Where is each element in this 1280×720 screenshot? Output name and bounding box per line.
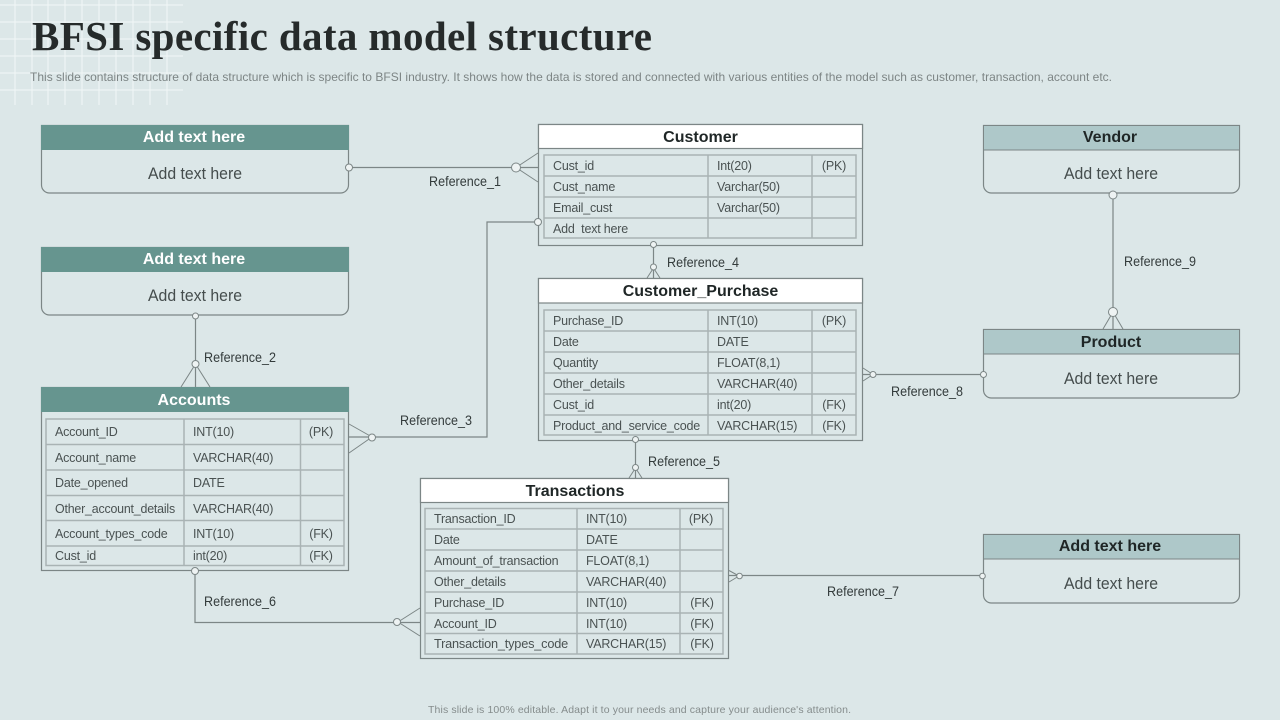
table: Accounts: Accounts — [158, 392, 231, 409]
connector: Reference_5: Reference_5 — [648, 454, 720, 469]
table: Accounts: (FK) — [309, 527, 333, 541]
table: Accounts: INT(10) — [193, 527, 234, 541]
table: Accounts: Account_name — [55, 451, 136, 465]
panel: Product: Product — [1081, 334, 1142, 351]
table: Customer: Cust_id — [553, 159, 594, 173]
panel: top-left entity: Add text here — [148, 164, 242, 183]
table: Transactions: INT(10) — [586, 512, 627, 526]
table: Transactions — [420, 478, 728, 658]
table: Customer: Varchar(50) — [717, 180, 780, 194]
connector: Reference_3: Reference_3 — [400, 413, 472, 428]
table: Transactions: (PK) — [689, 512, 713, 526]
connector: Reference_8 — [863, 368, 986, 399]
table: Customer: Cust_name — [553, 180, 615, 194]
table: Customer: Add text here — [553, 222, 628, 236]
table: Transactions: Transaction_ID — [434, 512, 516, 526]
table: Transactions: Amount_of_transaction — [434, 554, 559, 568]
connector: Reference_3 — [349, 218, 542, 453]
panel: bottom-right entity — [984, 534, 1240, 603]
connector: Reference_4: Reference_4 — [667, 255, 739, 270]
panel: second left entity — [41, 247, 349, 315]
table: Customer_Purchase: Purchase_ID — [553, 314, 623, 328]
table: Accounts: (PK) — [309, 425, 333, 439]
table: Customer: Email_cust — [553, 201, 613, 215]
panel: Vendor: Vendor — [1083, 129, 1137, 146]
table: Accounts: VARCHAR(40) — [193, 502, 273, 516]
table: Transactions: INT(10) — [586, 617, 627, 631]
table: Customer_Purchase: Quantity — [553, 356, 599, 370]
table: Customer_Purchase: (PK) — [822, 314, 846, 328]
table: Accounts: DATE — [193, 476, 225, 490]
table: Transactions: VARCHAR(15) — [586, 637, 666, 651]
table: Customer: Int(20) — [717, 159, 752, 173]
table: Customer_Purchase: INT(10) — [717, 314, 758, 328]
table: Customer_Purchase: Other_details — [553, 377, 625, 391]
table: Customer: Customer — [663, 129, 738, 146]
connector: Reference_6: Reference_6 — [204, 594, 276, 609]
panel: Product — [984, 330, 1240, 398]
connector: Reference_8: Reference_8 — [891, 384, 963, 399]
table: Accounts: Account_types_code — [55, 527, 168, 541]
panel: Product: Add text here — [1064, 369, 1158, 388]
table: Customer_Purchase: DATE — [717, 335, 749, 349]
table: Customer: Varchar(50) — [717, 201, 780, 215]
connector: Reference_9: Reference_9 — [1124, 254, 1196, 269]
connector: Reference_1 — [346, 153, 538, 189]
table: Customer — [538, 124, 862, 246]
table: Transactions: Transactions — [526, 483, 624, 500]
table: Customer_Purchase — [538, 278, 862, 440]
panel: bottom-right entity: Add text here — [1059, 538, 1161, 555]
table: Customer_Purchase: Date — [553, 335, 579, 349]
table: Transactions: Transaction_types_code — [434, 637, 568, 651]
table: Accounts: Date_opened — [55, 476, 128, 490]
table: Transactions: (FK) — [690, 596, 714, 610]
table: Transactions: FLOAT(8,1) — [586, 554, 649, 568]
panel: Vendor: Add text here — [1064, 164, 1158, 183]
panel: top-left entity: Add text here — [143, 129, 245, 146]
table: Transactions: DATE — [586, 533, 618, 547]
panel: bottom-right entity: Add text here — [1064, 574, 1158, 593]
table: Accounts: int(20) — [193, 549, 227, 563]
table: Transactions: Account_ID — [434, 617, 497, 631]
table: Customer_Purchase: Cust_id — [553, 398, 594, 412]
panel: second left entity: Add text here — [148, 286, 242, 305]
connector: Reference_6 — [192, 568, 420, 636]
table: Accounts: Other_account_details — [55, 502, 175, 516]
table: Accounts: INT(10) — [193, 425, 234, 439]
panel: Vendor — [984, 126, 1240, 193]
table: Transactions: VARCHAR(40) — [586, 575, 666, 589]
table: Customer_Purchase: VARCHAR(15) — [717, 419, 797, 433]
table: Transactions: Purchase_ID — [434, 596, 504, 610]
table: Accounts: (FK) — [309, 549, 333, 563]
connector: Reference_2: Reference_2 — [204, 350, 276, 365]
connector: Reference_4 — [647, 242, 739, 278]
subtitle description: This slide contains structure of data structure which is specific to BFSI industry. It shows how the data is stored and connected with various entities of the model such as customer, transaction, account etc. — [30, 70, 1112, 84]
table: Customer: (PK) — [822, 159, 846, 173]
connector: Reference_7: Reference_7 — [827, 584, 899, 599]
table: Transactions: Date — [434, 533, 460, 547]
connector: Reference_5 — [629, 436, 720, 478]
table: Transactions: INT(10) — [586, 596, 627, 610]
table: Accounts: VARCHAR(40) — [193, 451, 273, 465]
table: Accounts: Cust_id — [55, 549, 96, 563]
connector: Reference_1: Reference_1 — [429, 174, 501, 189]
panel: second left entity: Add text here — [143, 251, 245, 268]
connector: Reference_2 — [181, 313, 276, 387]
panel: top-left entity — [41, 125, 349, 193]
table: Customer_Purchase: Customer_Purchase — [623, 283, 778, 300]
title: BFSI specific data model structure — [32, 13, 652, 59]
table: Customer_Purchase: Product_and_service_code — [553, 419, 700, 433]
table: Customer_Purchase: FLOAT(8,1) — [717, 356, 780, 370]
footer note: This slide is 100% editable. Adapt it to your needs and capture your audience's attention. — [428, 704, 851, 716]
connector: Reference_7 — [729, 570, 985, 599]
table: Customer_Purchase: int(20) — [717, 398, 751, 412]
table: Customer_Purchase: VARCHAR(40) — [717, 377, 797, 391]
table: Customer_Purchase: (FK) — [822, 419, 846, 433]
table: Accounts — [41, 387, 349, 570]
table: Transactions: (FK) — [690, 617, 714, 631]
table: Transactions: (FK) — [690, 637, 714, 651]
connector: Reference_9 — [1103, 191, 1196, 329]
table: Customer_Purchase: (FK) — [822, 398, 846, 412]
table: Accounts: Account_ID — [55, 425, 118, 439]
table: Transactions: Other_details — [434, 575, 506, 589]
